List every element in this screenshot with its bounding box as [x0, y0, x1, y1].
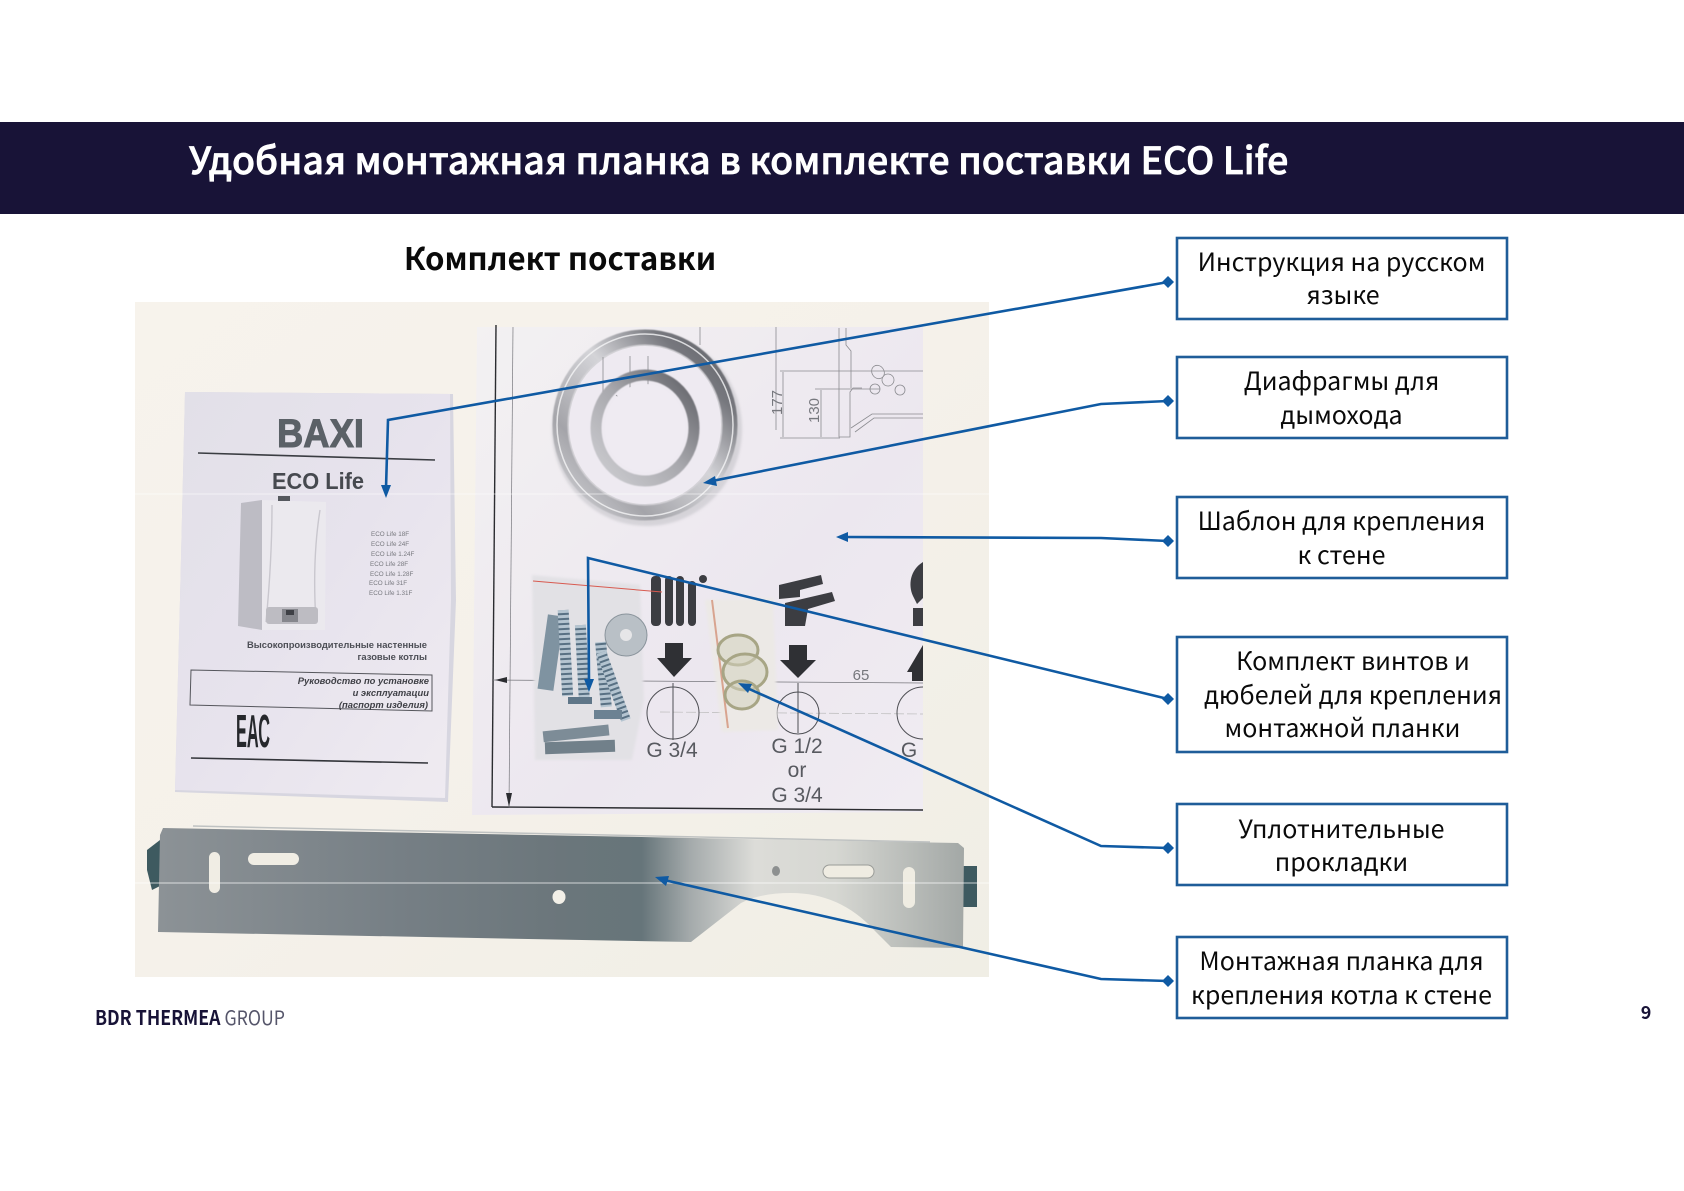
technical drawing [700, 327, 923, 438]
callout: flue diaphragms [1177, 357, 1507, 438]
photo: delivery kit [135, 302, 989, 977]
callout: wall template [1177, 497, 1507, 578]
mounting plate [147, 826, 977, 948]
radiator icon [651, 575, 707, 626]
callout: flue diaphragms: Диафрагмы для [1244, 362, 1439, 398]
gasket bag [705, 598, 778, 732]
mounting template sheet: 177 [769, 390, 786, 415]
booklet: manual: (паспорт изделия) [339, 699, 428, 710]
callout: screws and dowels: дюбелей для крепления [1204, 676, 1502, 712]
booklet: manual: ECO Life 1.28F [370, 571, 414, 578]
mounting template sheet: 130 [806, 398, 823, 423]
callout: screws and dowels: Комплект винтов и [1236, 642, 1470, 678]
tap icon [779, 575, 835, 626]
booklet: manual: ECO Life 24F [371, 541, 409, 548]
booklet: manual: ECO Life 1.31F [369, 590, 413, 597]
mounting template sheet [472, 325, 949, 815]
subheading: Комплект поставки [404, 234, 716, 279]
leader arrow: flue diaphragms [703, 395, 1174, 486]
booklet: manual: BAXI [277, 412, 364, 456]
callout: gaskets: прокладки [1275, 843, 1408, 879]
leader arrow: mounting plate [655, 876, 1174, 987]
callout: gaskets: Уплотнительные [1238, 810, 1445, 846]
screw bag [532, 575, 662, 760]
booklet: manual: ECO Life 28F [370, 561, 408, 568]
leader arrow: gaskets [738, 683, 1174, 854]
mounting template sheet: 65 [853, 667, 869, 684]
booklet: manual: ECO Life 1.24F [371, 551, 415, 558]
mounting template sheet: G 1/2 [771, 735, 823, 758]
callout: screws and dowels: монтажной планки [1225, 709, 1460, 745]
callout: mounting plate: Монтажная планка для [1199, 942, 1484, 978]
connection circles [647, 683, 949, 740]
footer logo: BDR THERMEA GROUP [95, 1002, 285, 1031]
callout: wall template: Шаблон для крепления [1198, 502, 1485, 538]
callout: gaskets [1177, 804, 1507, 885]
header band [0, 122, 1684, 214]
mounting template sheet: G 3/4 [771, 784, 823, 807]
callout: mounting plate [1177, 937, 1507, 1018]
title: Удобная монтажная планка в комплекте поставки ECO Life [189, 130, 1288, 185]
callout: flue diaphragms: дымохода [1280, 396, 1403, 432]
mounting template sheet: G 3/4 [646, 739, 698, 762]
callout: mounting plate: крепления котла к стене [1191, 976, 1492, 1012]
callout: screws and dowels [1177, 637, 1507, 752]
booklet: manual: газовые котлы [358, 651, 427, 662]
leader arrow: screws and dowels [584, 558, 1174, 705]
page number: 9 [1641, 999, 1651, 1025]
down arrows [657, 643, 692, 677]
callout: manual: языке [1306, 276, 1380, 312]
callout: manual: Инструкция на русском [1198, 243, 1485, 279]
boiler illustration [238, 496, 326, 630]
callout: manual [1177, 238, 1507, 319]
booklet: manual: ЕАС [236, 705, 270, 757]
booklet: manual: ECO Life 18F [371, 531, 409, 538]
booklet: manual [175, 392, 456, 802]
leader arrow: manual [381, 276, 1174, 498]
booklet: manual: ECO Life [272, 468, 364, 494]
mounting template sheet: G [901, 739, 917, 762]
callout: wall template: к стене [1298, 536, 1385, 572]
booklet: manual: и эксплуатации [353, 687, 429, 698]
mounting template sheet: or [788, 759, 806, 782]
booklet: manual: ECO Life 31F [369, 580, 407, 587]
booklet: manual: Высокопроизводительные настенные [247, 639, 427, 650]
booklet: manual: Руководство по установке [298, 675, 429, 686]
flue diaphragm rings [552, 332, 742, 526]
leader arrow: wall template [836, 532, 1174, 547]
